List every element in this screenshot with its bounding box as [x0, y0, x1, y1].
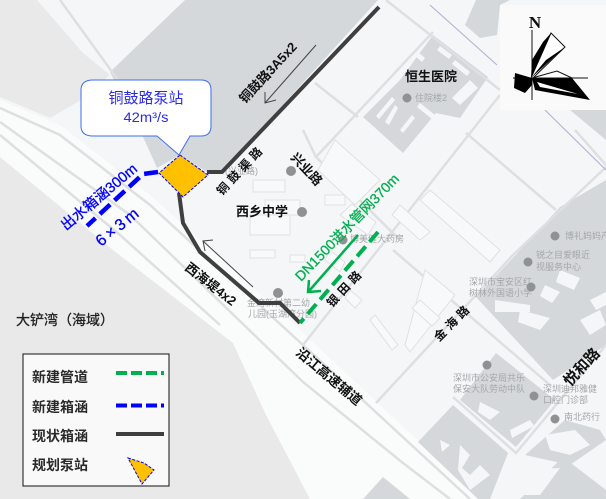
- legend: 规划泵站: [32, 457, 88, 473]
- north arrow wind rose: [500, 5, 606, 110]
- map labels: [225, 92, 606, 422]
- map labels: 树林外国语小学: [469, 287, 532, 298]
- sea label: 大铲湾（海域）: [16, 312, 114, 328]
- flow arrow: xihaidi: [203, 240, 253, 287]
- map labels: 视服务中心: [536, 261, 581, 272]
- legend: 新建箱涵: [32, 399, 88, 415]
- building outlines: [250, 140, 500, 352]
- map labels: 深圳迪邦雅健: [543, 383, 597, 394]
- map labels: 住院楼2: [415, 92, 447, 103]
- existing culvert lines: [179, 7, 379, 323]
- blue culvert labels: 出水箱涵300m: [58, 160, 141, 234]
- new pipeline dashed: [300, 232, 378, 323]
- callout: 铜鼓路泵站: [108, 90, 184, 107]
- map labels: 保安大队劳动中队: [453, 383, 525, 394]
- legend: 现状箱涵: [32, 428, 88, 444]
- reservoir area: [110, 0, 378, 172]
- map labels: 金湾新村第二幼: [247, 297, 310, 308]
- building blocks: [363, 0, 606, 499]
- pump station: [159, 155, 208, 197]
- expressway band: [0, 100, 480, 499]
- road and pipe labels: 西海堤4x2: [182, 260, 239, 309]
- legend: 新建管道: [32, 369, 88, 385]
- map pois: [273, 94, 560, 424]
- map labels: (兴业路): [225, 165, 258, 176]
- road and pipe labels: 西乡中学: [236, 204, 288, 219]
- map labels: 深圳市公安局共乐: [453, 372, 525, 383]
- road and pipe labels: [182, 39, 604, 409]
- green flow arrow: [308, 235, 358, 292]
- green pipe label: DN1500进水管网370m: [292, 171, 402, 284]
- flow arrow: tonggu road: [265, 45, 316, 103]
- map labels: 锐之目爱眼近: [536, 249, 590, 260]
- callout: 42m³/s: [124, 109, 168, 125]
- north arrow wind rose: N: [529, 13, 542, 32]
- road and pipe labels: 铜鼓路3A5x2: [236, 39, 300, 106]
- road and pipe labels: 铜鼓渠路: [213, 141, 268, 198]
- sea area: [0, 157, 310, 499]
- map labels: 深圳市宝安区红: [469, 276, 532, 287]
- legend: [23, 354, 169, 486]
- map labels: 口腔门诊部: [543, 394, 588, 405]
- road and pipe labels: 悦和路: [560, 345, 604, 390]
- new culvert dashed: [87, 172, 158, 226]
- road and pipe labels: 恒生医院: [405, 69, 457, 84]
- white buildings in blocks: [376, 46, 606, 495]
- map labels: 南北药行: [564, 411, 600, 422]
- blue culvert labels: 6×3m: [93, 205, 142, 250]
- callout: [81, 80, 211, 155]
- map labels: 儿园(玉湖湾分园): [248, 308, 317, 319]
- road and pipe labels: 银田路: [323, 265, 367, 310]
- road and pipe labels: 金海路: [431, 300, 475, 344]
- road and pipe labels: 沿江高速辅道: [293, 344, 366, 409]
- map labels: 博美健大药房: [350, 233, 404, 244]
- road and pipe labels: 兴业路: [288, 150, 325, 189]
